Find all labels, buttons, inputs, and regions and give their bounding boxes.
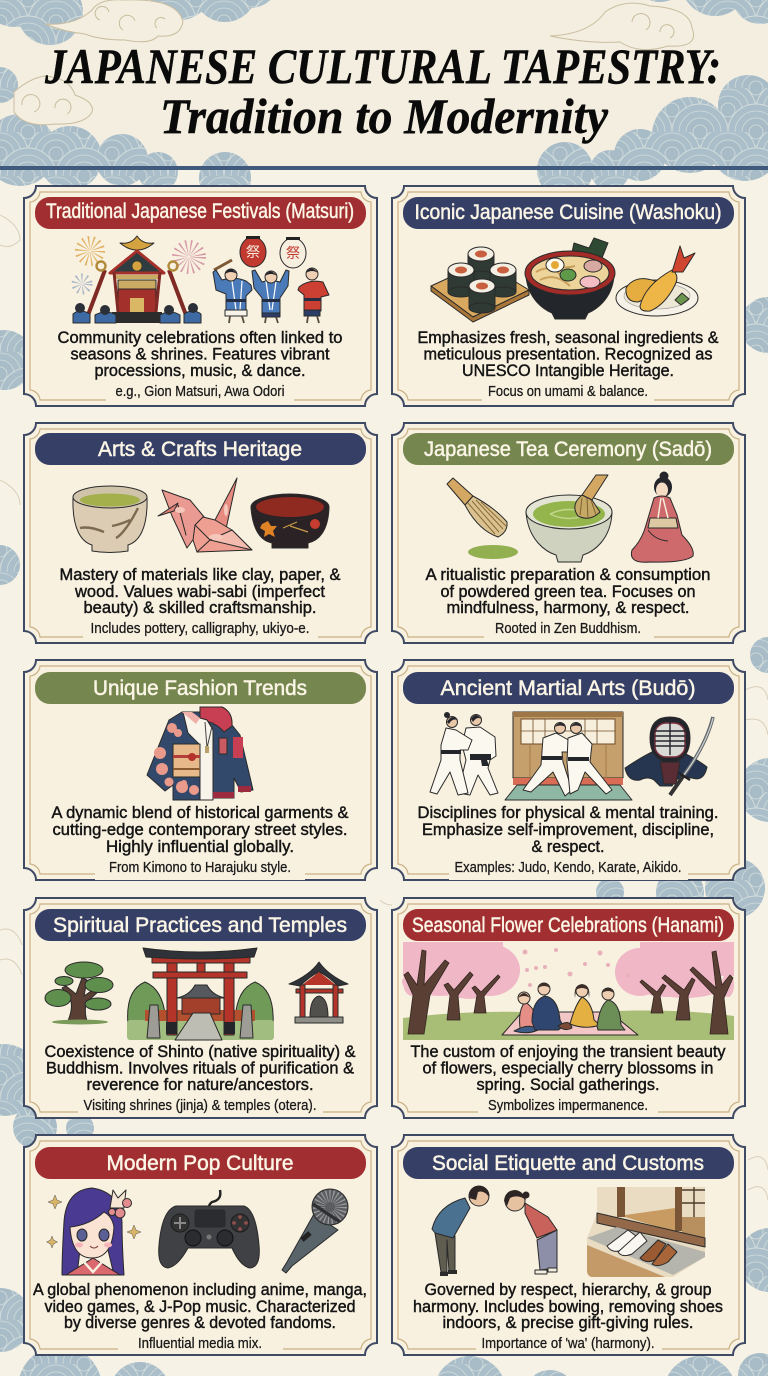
panel: cuisine — [392, 186, 745, 406]
text: cuisine: Emphasizes fresh, seasonal ingredients & — [418, 328, 719, 347]
text: etiquette: indoors, & precise gift-giving rules. — [442, 1313, 694, 1332]
title: Tradition to Modernity — [160, 88, 609, 144]
header: festivals — [35, 197, 366, 229]
header wave clouds — [0, 0, 768, 204]
icon: dancers with lanterns — [213, 236, 329, 323]
header: festivals: Traditional Japanese Festivals (Matsuri) — [46, 200, 354, 223]
text: etiquette: harmony. Includes bowing, removing shoes — [413, 1297, 723, 1316]
icon: pottery tea cup — [73, 486, 147, 552]
icon: kendo armor and sword — [625, 717, 713, 795]
text: etiquette: Importance of 'wa' (harmony). — [482, 1336, 654, 1352]
text: cuisine: Focus on umami & balance. — [488, 384, 648, 400]
text: martial arts: Disciplines for physical & mental training. — [418, 803, 718, 822]
text: spiritual: Coexistence of Shinto (native spirituality) & — [44, 1042, 356, 1061]
text: tea: A ritualistic preparation & consumption — [426, 565, 710, 584]
icon: game controller — [159, 1190, 259, 1268]
text: tea: mindfulness, harmony, & respect. — [446, 598, 690, 617]
icon: origami crane — [158, 478, 252, 552]
text: hanami: The custom of enjoying the transient beauty — [410, 1042, 726, 1061]
text: cuisine — [418, 328, 719, 400]
text: festivals — [58, 328, 342, 400]
text: martial arts: & respect. — [532, 837, 604, 856]
text: fashion: cutting-edge contemporary street styles. — [52, 820, 348, 839]
header: etiquette: Social Etiquette and Customs — [432, 1152, 704, 1175]
header: etiquette — [403, 1147, 734, 1179]
header: spiritual: Spiritual Practices and Temples — [53, 914, 347, 937]
header: tea: Japanese Tea Ceremony (Sadō) — [424, 438, 712, 461]
icon: lacquer bowl — [251, 494, 329, 548]
text: martial arts: Examples: Judo, Kendo, Karate, Aikido. — [454, 860, 682, 876]
text: arts — [60, 565, 341, 637]
text: pop culture: A global phenomenon including anime, manga, — [33, 1280, 367, 1299]
icon: dancers with lanterns: 祭 — [246, 242, 260, 262]
text: fashion: From Kimono to Harajuku style. — [109, 860, 291, 876]
text: pop culture — [33, 1280, 367, 1352]
text: fashion: Highly influential globally. — [106, 837, 294, 856]
header: pop culture — [35, 1147, 366, 1179]
text: cuisine: UNESCO Intangible Heritage. — [462, 361, 674, 380]
icon: bonsai pine — [45, 962, 113, 1024]
text: arts: wood. Values wabi-sabi (imperfect — [74, 582, 325, 601]
panel: hanami — [392, 898, 745, 1118]
icon: matcha bowl — [526, 475, 612, 562]
icon: ramen bowl — [525, 238, 615, 319]
header: fashion: Unique Fashion Trends — [93, 677, 307, 700]
text: hanami: spring. Social gatherings. — [476, 1075, 660, 1094]
panel: tea ceremony — [392, 423, 745, 643]
header: spiritual — [35, 909, 366, 941]
text: festivals: e.g., Gion Matsuri, Awa Odori — [116, 384, 284, 400]
text: spiritual — [44, 1042, 356, 1114]
text: festivals: Community celebrations often linked to — [58, 328, 342, 347]
icon: bamboo whisk and matcha powder — [447, 478, 518, 559]
icon: dojo interior with judo throw — [505, 712, 632, 800]
text: spiritual: Visiting shrines (jinja) & temples (otera). — [84, 1098, 316, 1114]
header: hanami — [403, 909, 734, 941]
panel: spiritual practices — [24, 898, 377, 1118]
header divider — [0, 166, 768, 170]
text: arts: Includes pottery, calligraphy, ukiyo-e. — [90, 621, 310, 637]
panel: arts and crafts — [24, 423, 377, 643]
icon: kneeling woman in kimono — [631, 472, 693, 562]
text: spiritual: Buddhism. Involves rituals of purification & — [46, 1058, 355, 1078]
icon: tempura plate — [616, 246, 698, 316]
text: tea — [426, 565, 710, 637]
panel: etiquette — [392, 1135, 745, 1355]
header: cuisine: Iconic Japanese Cuisine (Washoku) — [414, 201, 722, 224]
text: hanami: Symbolizes impermanence. — [488, 1098, 648, 1114]
icon: small shrine with bell — [289, 962, 348, 1023]
text: martial arts: Emphasize self-improvement, discipline, — [422, 820, 714, 839]
panel: pop culture — [24, 1135, 377, 1355]
lower background waves — [0, 297, 768, 1376]
header: pop culture: Modern Pop Culture — [106, 1152, 294, 1175]
text: etiquette: Governed by respect, hierarchy, & group — [424, 1280, 712, 1299]
icon: sushi board — [431, 247, 529, 322]
panel: martial arts — [392, 660, 745, 880]
text: pop culture: video games, & J-Pop music. Characterized — [44, 1297, 356, 1316]
text: festivals: seasons & shrines. Features vibrant — [70, 344, 330, 364]
margin scroll lines — [0, 215, 768, 1200]
text: arts: beauty) & skilled craftsmanship. — [84, 598, 316, 617]
text: hanami — [410, 1042, 726, 1114]
text: festivals: processions, music, & dance. — [94, 361, 306, 380]
icon: judo pair standing — [430, 712, 498, 795]
text: arts: Mastery of materials like clay, paper, & — [60, 565, 341, 584]
header: cuisine — [403, 197, 734, 229]
text: fashion: A dynamic blend of historical garments & — [52, 803, 349, 822]
text: pop culture: Influential media mix. — [138, 1336, 262, 1352]
panel: festivals — [24, 186, 377, 406]
text: etiquette — [413, 1280, 723, 1352]
title — [44, 38, 721, 144]
header: martial arts — [403, 672, 734, 704]
text: fashion — [52, 803, 349, 876]
header: arts: Arts & Crafts Heritage — [98, 438, 302, 461]
icon: anime character — [46, 1188, 141, 1275]
text: martial arts — [418, 803, 718, 876]
header: martial arts: Ancient Martial Arts (Budō) — [440, 677, 696, 700]
text: pop culture: by diverse genres & devoted fandoms. — [64, 1313, 336, 1332]
icon: mikoshi shrine with bearers and fireworks — [73, 236, 201, 323]
header: tea — [403, 433, 734, 465]
icon: torii gate and temple — [127, 948, 274, 1040]
icon: dancers with lanterns: 祭 — [286, 243, 300, 263]
text: tea: Rooted in Zen Buddhism. — [495, 621, 641, 637]
text: hanami: of flowers, especially cherry blossoms in — [422, 1058, 714, 1078]
header: arts — [35, 433, 366, 465]
icon: kimono and streetwear jacket — [147, 707, 253, 800]
icon: bowing people — [432, 1186, 557, 1276]
header: fashion — [35, 672, 366, 704]
panel: fashion — [24, 660, 377, 880]
icon: cherry blossom picnic — [402, 942, 734, 1040]
icon: microphone — [282, 1189, 348, 1273]
text: tea: of powdered green tea. Focuses on — [440, 582, 696, 601]
icon: entryway with shoes — [587, 1187, 705, 1277]
text: spiritual: reverence for nature/ancestors. — [86, 1075, 314, 1094]
header cloud curls — [14, 0, 694, 125]
text: cuisine: meticulous presentation. Recognized as — [424, 344, 712, 364]
